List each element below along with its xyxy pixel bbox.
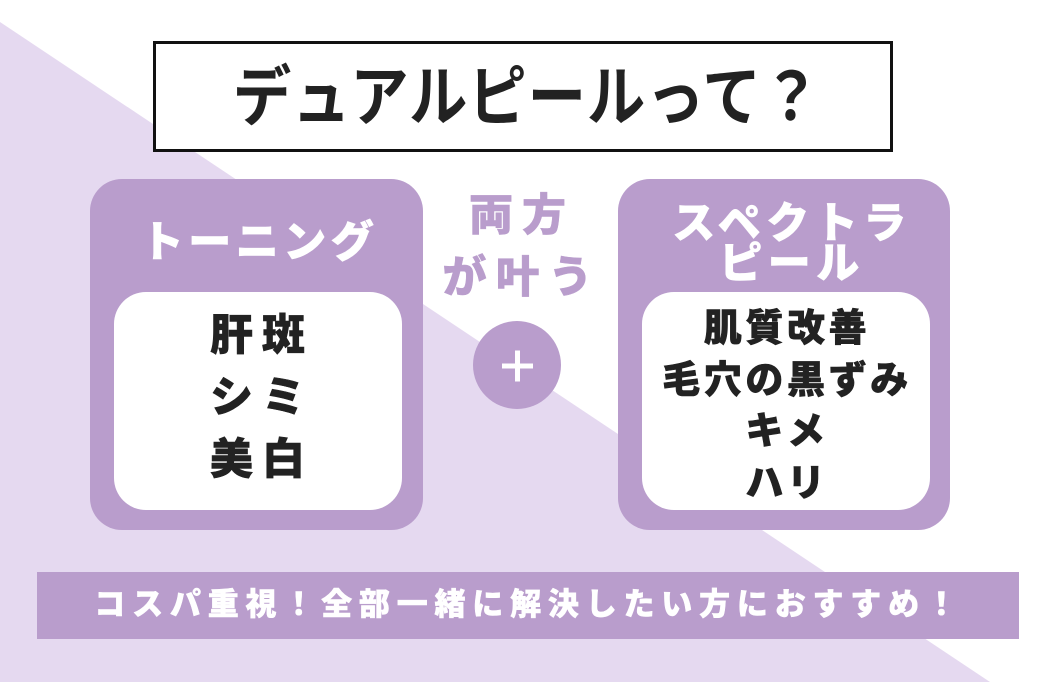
spectra list	[642, 292, 930, 510]
plus icon	[473, 321, 561, 409]
toning list	[114, 292, 402, 510]
spectra items: ハリ	[745, 462, 829, 504]
plus sign	[502, 350, 533, 382]
spectra heading	[672, 200, 912, 288]
spectra items: キメ	[745, 411, 829, 453]
centre text	[442, 191, 602, 302]
toning items	[210, 312, 314, 484]
panel: spectra peel	[618, 179, 950, 530]
toning items: シミ	[210, 374, 314, 422]
spectra heading: スペクトラ	[672, 200, 912, 248]
title box	[153, 41, 893, 152]
title: デュアルピールって？	[233, 60, 821, 134]
spectra items: 肌質改善	[704, 308, 870, 350]
toning items: 美白	[210, 436, 314, 484]
toning items: 肝斑	[210, 312, 314, 360]
spectra items	[662, 308, 912, 504]
toning heading: トーニング	[141, 219, 378, 267]
banner text: コスパ重視！全部一緒に解決したい方におすすめ！	[94, 587, 964, 622]
panel: toning	[90, 179, 423, 530]
centre text: が叶う	[442, 253, 602, 302]
bottom banner	[37, 572, 1019, 639]
spectra items: 毛穴の黒ずみ	[662, 360, 912, 402]
centre text: 両方	[469, 191, 575, 240]
spectra heading: ピール	[719, 240, 865, 288]
